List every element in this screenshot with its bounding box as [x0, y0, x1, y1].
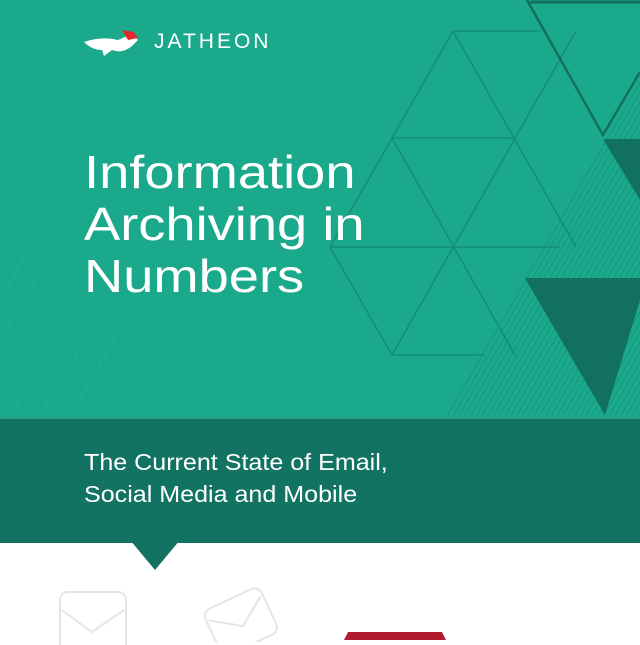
logo — [84, 30, 271, 56]
title — [84, 146, 365, 302]
icon: envelope 1 — [59, 591, 127, 645]
title: Archiving in — [84, 198, 365, 250]
icon: envelope 2 — [204, 588, 278, 642]
subtitle — [84, 449, 388, 507]
red element — [344, 632, 446, 640]
subtitle: The Current State of Email, — [84, 449, 388, 475]
header background — [0, 0, 640, 417]
icon: fox — [84, 30, 138, 56]
brand name: JATHEON — [154, 30, 271, 53]
dark triangles — [603, 139, 640, 200]
band pointer — [130, 540, 180, 570]
title: Information — [84, 146, 356, 198]
subtitle band — [0, 417, 640, 543]
striped triangles — [603, 75, 640, 139]
subtitle: Social Media and Mobile — [84, 481, 357, 507]
title: Numbers — [84, 250, 304, 302]
